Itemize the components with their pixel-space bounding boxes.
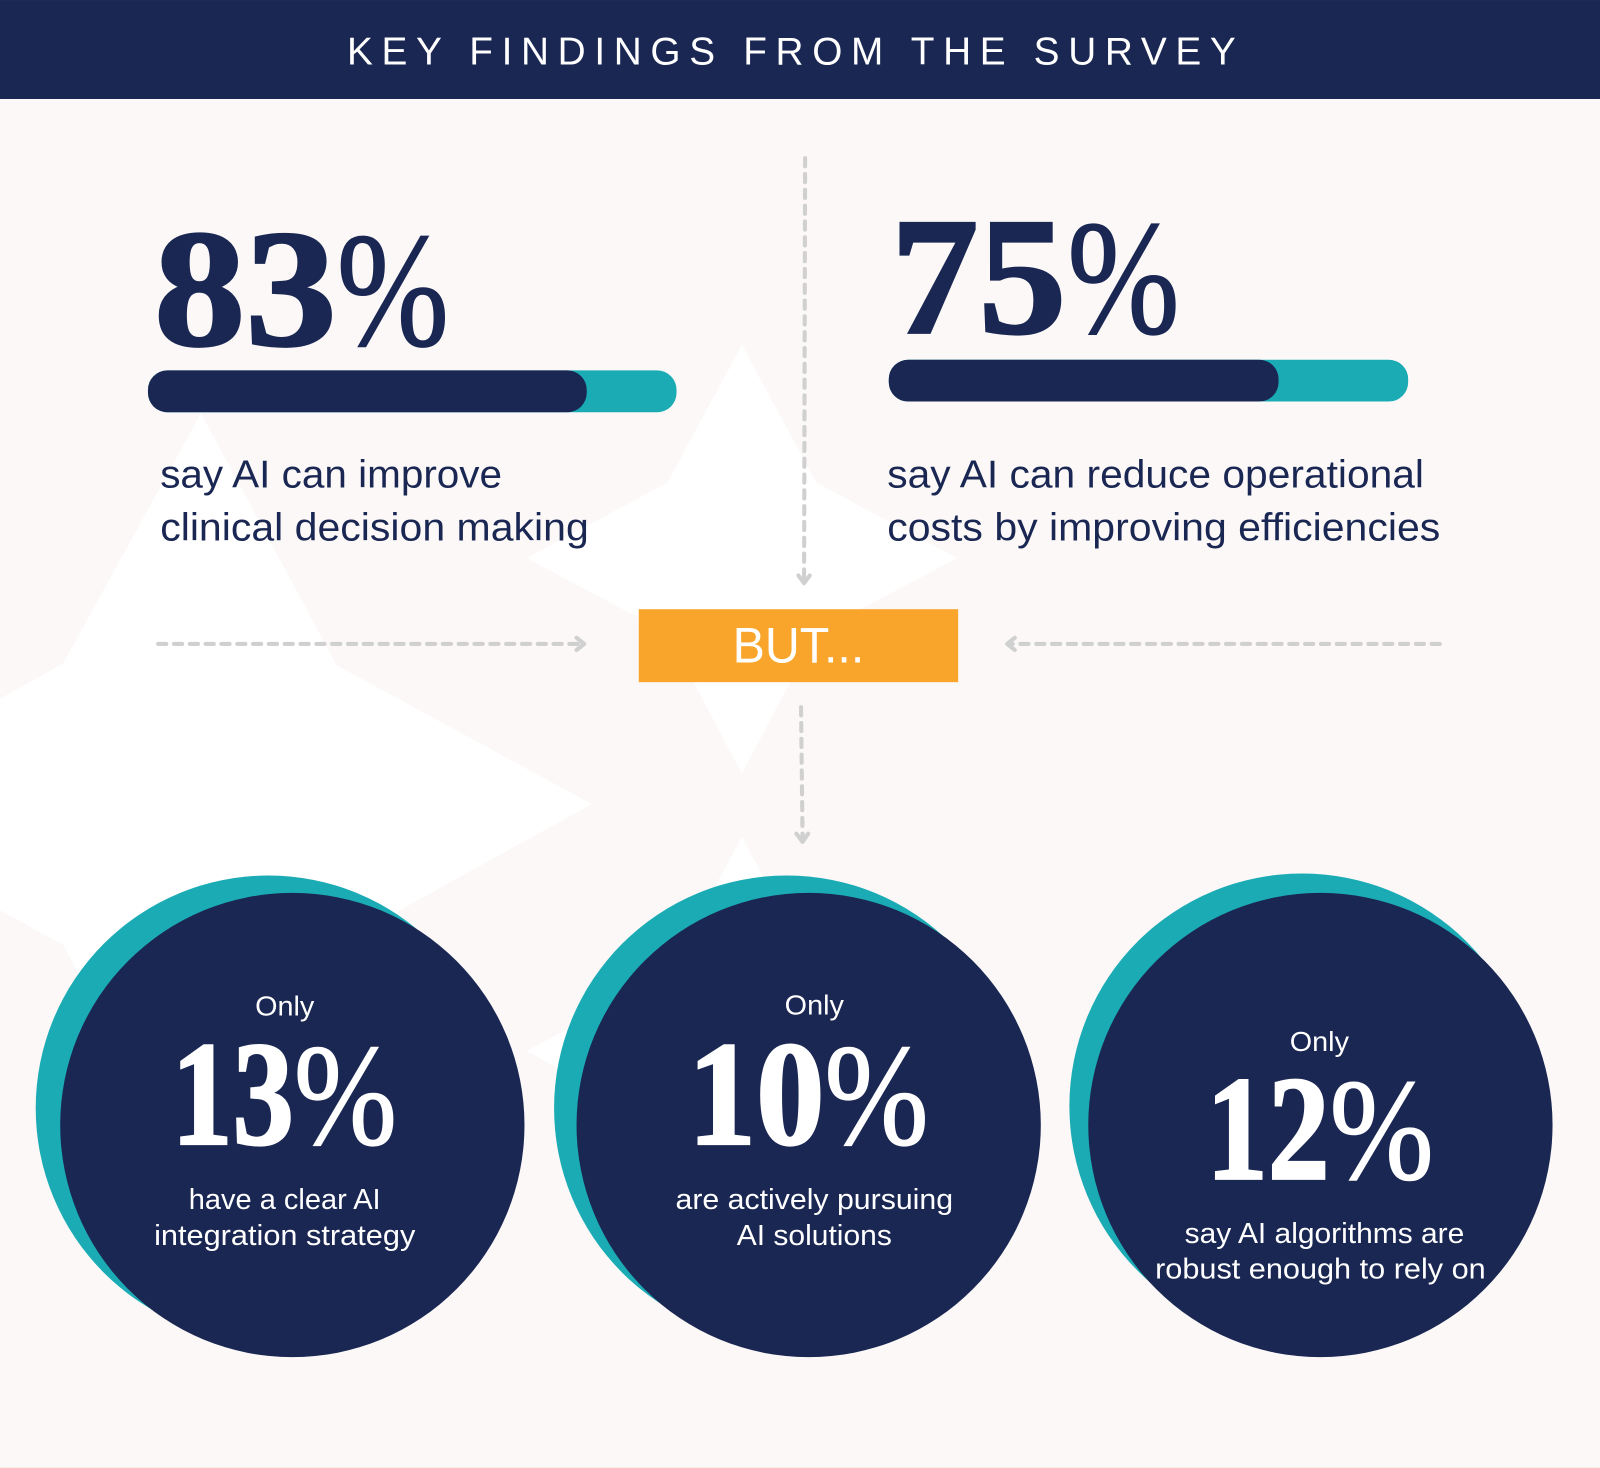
label: Only: Only bbox=[785, 989, 844, 1020]
progress bar: 75% bbox=[889, 360, 1408, 402]
stat: 10% bbox=[688, 1012, 929, 1177]
stat: 13%: % bbox=[294, 1016, 397, 1176]
label: Only: Only bbox=[1290, 1026, 1349, 1057]
stat: 12% bbox=[1206, 1047, 1434, 1212]
description: 83%: clinical decision making bbox=[160, 506, 589, 549]
arrow: left horizontal to BUT bbox=[158, 638, 584, 650]
arrow: right horizontal to BUT bbox=[1007, 638, 1440, 650]
description: 13%: integration strategy bbox=[154, 1220, 416, 1252]
description: 13% bbox=[154, 1184, 416, 1252]
stat: 83%: 83 bbox=[154, 197, 337, 382]
callout: BUT: BUT... bbox=[733, 617, 864, 673]
description: 13%: have a clear AI bbox=[189, 1184, 381, 1216]
label: Only: Only bbox=[255, 990, 315, 1021]
stat: 75%: 75 bbox=[891, 185, 1066, 370]
panel: 83% finding bbox=[148, 197, 677, 549]
panel: 75% finding bbox=[887, 185, 1440, 549]
progress bar: 83% bbox=[148, 370, 677, 412]
stat: 12%: 12 bbox=[1206, 1047, 1330, 1212]
description: 10%: AI solutions bbox=[737, 1220, 892, 1252]
arrow: top vertical to BUT bbox=[798, 158, 810, 583]
description: 83% bbox=[160, 453, 589, 549]
arrow: BUT down to circles bbox=[796, 707, 808, 842]
description: 75%: say AI can reduce operational bbox=[887, 453, 1424, 496]
stat: 12%: % bbox=[1330, 1051, 1434, 1211]
description: 10%: are actively pursuing bbox=[676, 1184, 953, 1216]
stat: 83% bbox=[154, 197, 449, 382]
header banner bbox=[0, 0, 1600, 99]
panel: 10% circle bbox=[554, 876, 1041, 1357]
title: KEY FINDINGS FROM THE SURVEY bbox=[347, 30, 1245, 73]
description: 75%: costs by improving efficiencies bbox=[887, 506, 1440, 549]
stat: 10%: 10 bbox=[688, 1012, 824, 1177]
stat: 75%: % bbox=[1067, 189, 1180, 369]
description: 10% bbox=[676, 1184, 953, 1252]
stat: 83%: % bbox=[337, 201, 449, 381]
callout: BUT bbox=[639, 609, 958, 682]
stat: 13%: 13 bbox=[171, 1012, 294, 1177]
description: 75% bbox=[887, 453, 1440, 549]
description: 83%: say AI can improve bbox=[160, 453, 502, 496]
stat: 10%: % bbox=[824, 1016, 929, 1176]
panel: 13% circle bbox=[36, 876, 524, 1357]
description: 12%: robust enough to rely on bbox=[1155, 1254, 1486, 1286]
description: 12% bbox=[1155, 1218, 1486, 1286]
panel: 12% circle bbox=[1069, 873, 1553, 1357]
description: 12%: say AI algorithms are bbox=[1185, 1218, 1464, 1250]
stat: 75% bbox=[891, 185, 1180, 370]
stat: 13% bbox=[171, 1012, 397, 1177]
